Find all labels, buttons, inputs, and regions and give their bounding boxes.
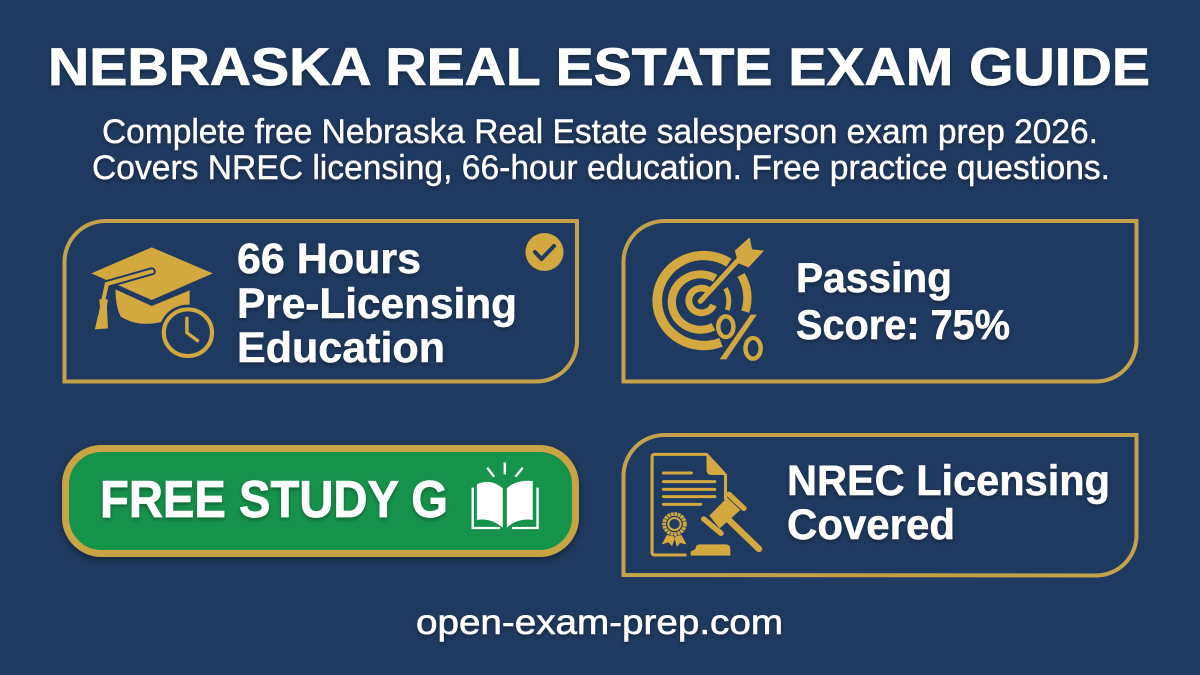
card text: Covered (787, 501, 955, 549)
button label: FREE STUDY G (100, 471, 448, 529)
icon: target with arrow and percent (657, 237, 764, 359)
subtitle: Complete free Nebraska Real Estate salesperson exam prep 2026. (102, 113, 1098, 151)
icon: graduation cap with clock (91, 247, 217, 361)
card text (787, 457, 1110, 549)
icon: document with seal and gavel (652, 454, 759, 556)
title: NEBRASKA REAL ESTATE EXAM GUIDE (48, 38, 1150, 97)
footer url: open-exam-prep.com (416, 603, 783, 642)
panel: passing score (624, 221, 1136, 382)
card text: Pre-Licensing (237, 280, 517, 328)
card text: NREC Licensing (787, 457, 1110, 505)
panel: 66 hours education (64, 221, 577, 382)
card text (237, 235, 517, 372)
icon: check badge (526, 233, 564, 271)
panel: NREC licensing (624, 435, 1136, 576)
card text: Education (237, 324, 445, 372)
card text: Score: 75% (796, 301, 1010, 348)
card text: 66 Hours (237, 235, 421, 283)
card text: Passing (796, 254, 952, 301)
subtitle: Covers NREC licensing, 66-hour education. Free practice questions. (92, 149, 1110, 187)
subtitle (92, 113, 1110, 187)
card text (796, 254, 1010, 348)
icon: open book (473, 462, 538, 528)
panel: free study guide button (66, 448, 576, 554)
